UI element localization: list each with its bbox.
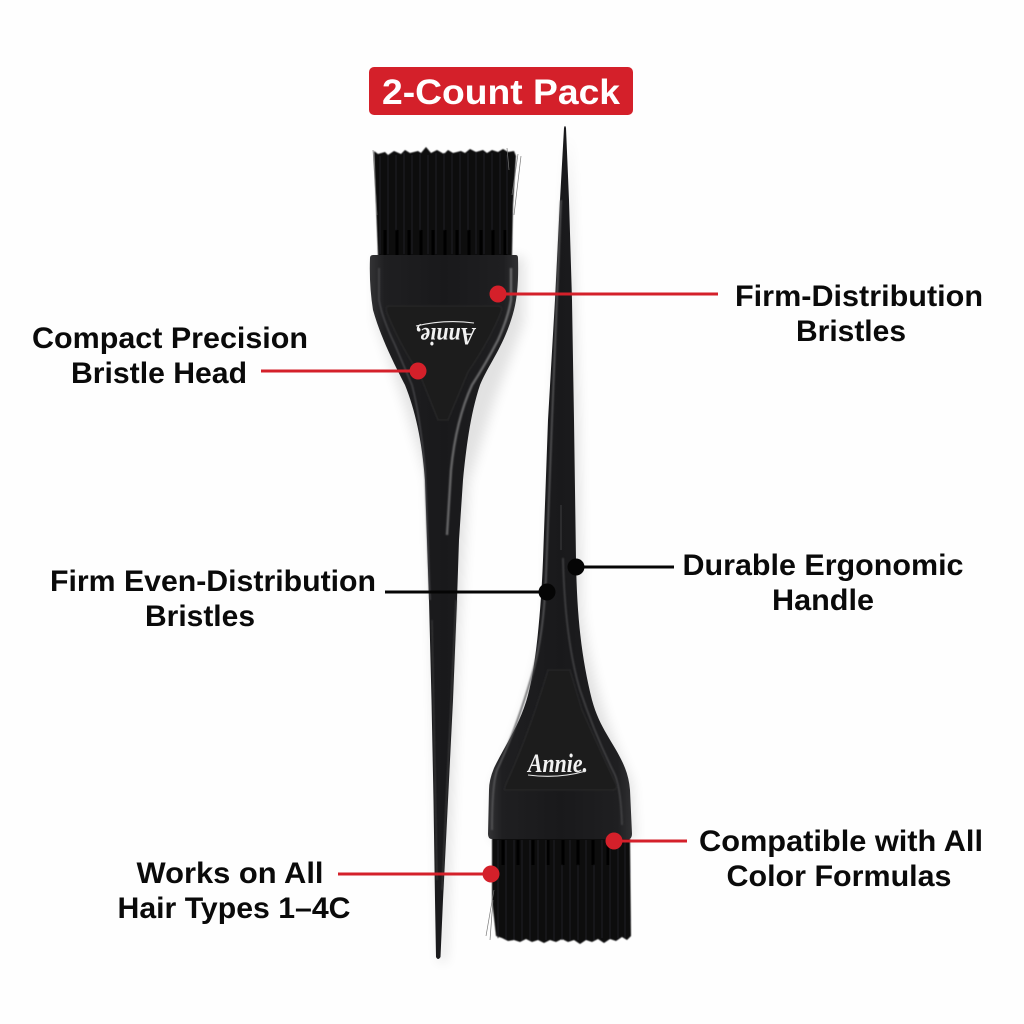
callout: Firm Even-Distribution Bristles xyxy=(50,565,556,633)
callout: Durable Ergonomic Handle: Handle xyxy=(772,584,874,617)
callout: Durable Ergonomic Handle xyxy=(568,549,964,617)
callout: Compatible with All Color Formulas: Compatible with All xyxy=(699,825,983,858)
callout: Works on All Hair Types: Hair Types 1–4C xyxy=(118,892,350,925)
handle xyxy=(488,126,632,839)
head panel xyxy=(386,306,502,420)
callout: Compatible with All Color Formulas: Color Formulas xyxy=(726,860,952,893)
callout: Firm Even-Distribution Bristles: Firm Even-Distribution xyxy=(50,565,376,598)
callout: Firm Even-Distribution Bristles: Bristles xyxy=(145,600,255,633)
callout: Compact Precision Bristle Head: Bristle Head xyxy=(71,357,247,390)
stray hairs xyxy=(486,890,494,940)
title badge: 2-Count Pack xyxy=(382,73,621,112)
callout: Durable Ergonomic Handle: Durable Ergonomic xyxy=(682,549,964,582)
callout: Compact Precision Bristle Head xyxy=(32,322,426,390)
callout: Firm-Distribution Bristles: Bristles xyxy=(796,315,906,348)
logo: Annie, xyxy=(415,322,477,349)
head panel xyxy=(505,670,616,790)
logo: Annie. xyxy=(526,749,588,778)
right brush xyxy=(486,126,636,944)
stray hairs xyxy=(373,148,521,215)
handle highlights xyxy=(492,200,561,830)
left brush xyxy=(370,147,524,962)
title badge xyxy=(369,67,633,115)
callout: Works on All Hair Types xyxy=(118,857,500,925)
callout: Compatible with All Color Formulas xyxy=(606,825,983,893)
callout: Compact Precision Bristle Head: Compact Precision xyxy=(32,322,308,355)
handle highlights xyxy=(379,268,430,600)
handle xyxy=(370,255,518,959)
bristles xyxy=(492,838,631,944)
callout: Firm-Distribution Bristles: Firm-Distribution xyxy=(735,280,983,313)
bristles xyxy=(374,147,516,256)
callout: Firm-Distribution Bristles xyxy=(490,280,983,348)
callout: Works on All Hair Types: Works on All xyxy=(136,857,324,890)
